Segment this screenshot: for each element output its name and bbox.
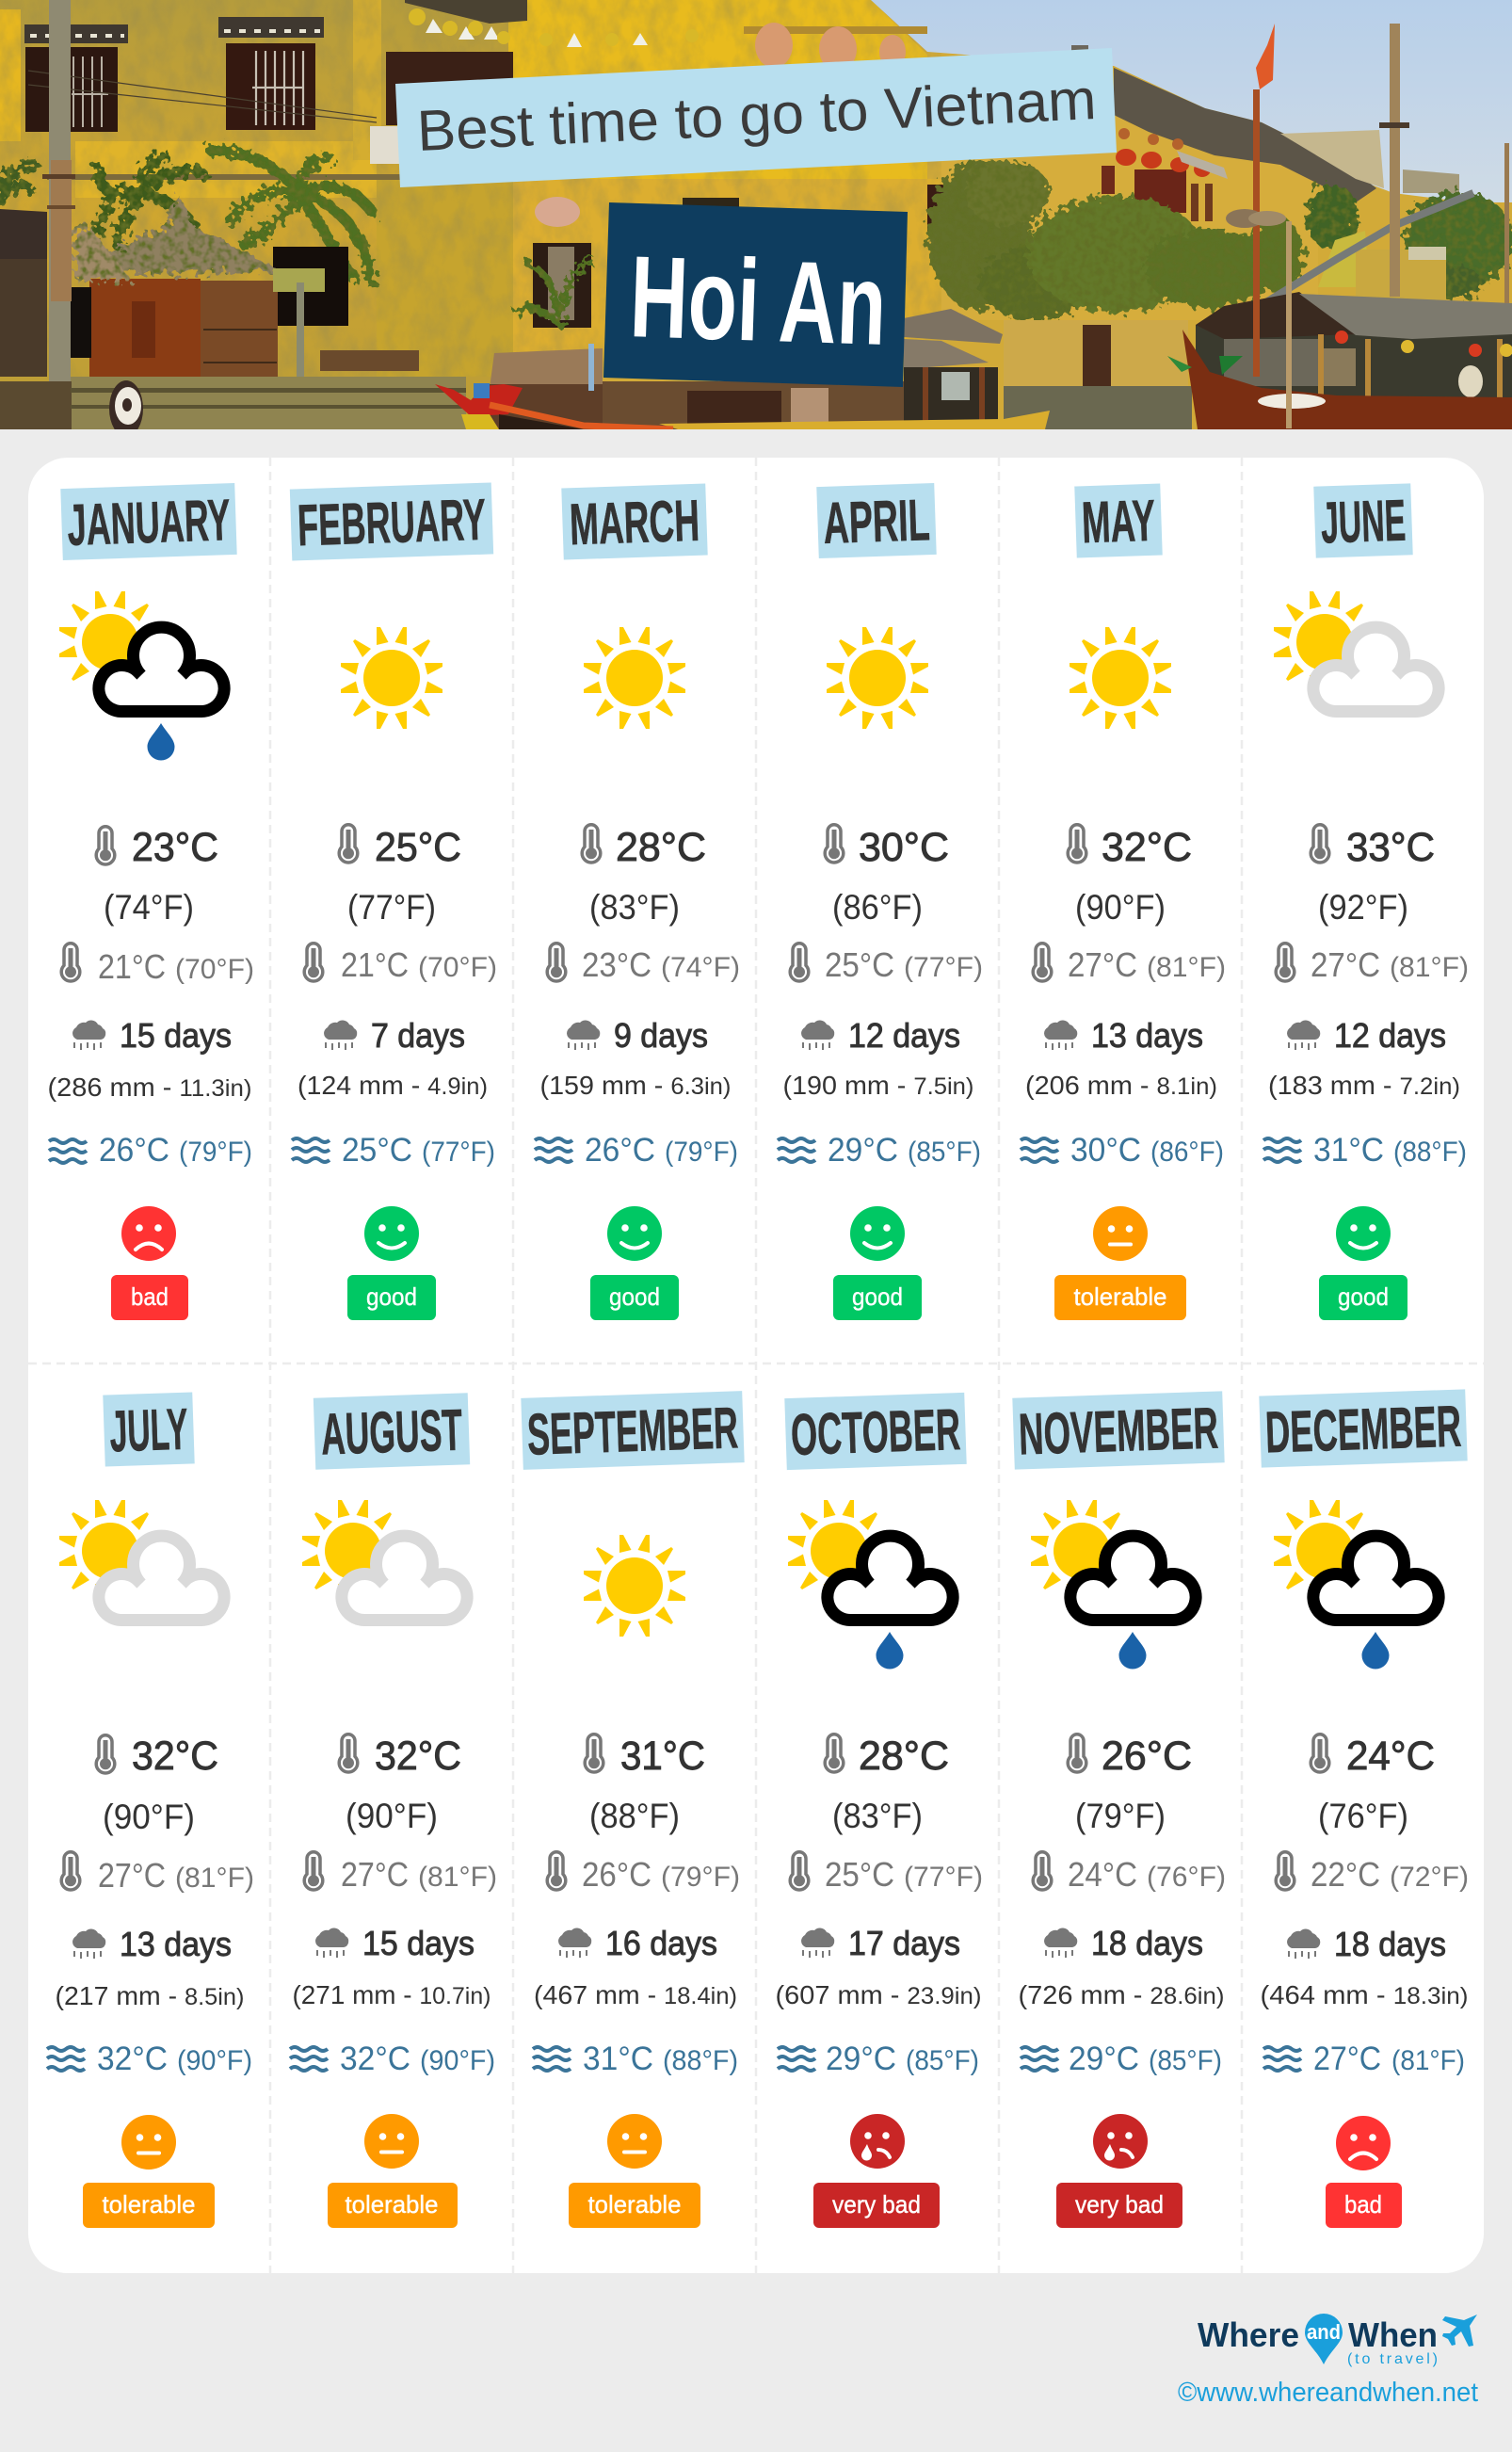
sea icon xyxy=(778,2047,815,2071)
sky xyxy=(871,0,1512,202)
rating badge xyxy=(590,1275,679,1320)
column: March xyxy=(535,483,740,1320)
sea temperature F: (90°F) xyxy=(177,2045,252,2076)
rating badge xyxy=(1054,1275,1186,1320)
rainfall: (183 mm - 7.2in) xyxy=(1268,1071,1460,1100)
month label: JANUARY xyxy=(66,488,232,558)
weather icon xyxy=(788,1500,953,1669)
sea temperature: 30°C xyxy=(1070,1132,1141,1169)
rainfall: (159 mm - 6.3in) xyxy=(539,1071,732,1100)
sea temperature F: (86°F) xyxy=(1150,1137,1224,1168)
rain icon xyxy=(567,1021,600,1050)
roofs xyxy=(1114,68,1376,202)
rainfall: (464 mm - 18.3in) xyxy=(1260,1980,1469,2009)
sea icon xyxy=(1263,1138,1301,1162)
logo word: and: and xyxy=(1307,2320,1341,2344)
month label: NOVEMBER xyxy=(1018,1396,1219,1467)
sea temperature: 26°C xyxy=(585,1132,655,1169)
low thermometer icon xyxy=(304,1852,323,1890)
low thermometer icon xyxy=(304,944,323,981)
rainy days: 15 days xyxy=(362,1924,475,1962)
rainfall: (217 mm - 8.5in) xyxy=(55,1981,245,2010)
low temperature F: (76°F) xyxy=(1147,1862,1226,1893)
spiral post xyxy=(109,380,143,429)
rating badge: good xyxy=(852,1282,903,1311)
low temperature: 27°C xyxy=(98,1856,166,1895)
upper yellow facade details xyxy=(744,26,927,34)
thermometer icon xyxy=(339,825,358,863)
thermometer icon xyxy=(1311,1734,1329,1772)
low temperature: 21°C xyxy=(341,945,409,984)
sea temperature: 31°C xyxy=(1313,1132,1384,1169)
rainy days: 9 days xyxy=(614,1016,708,1055)
low temperature F: (81°F) xyxy=(418,1862,497,1893)
high temperature: 26°C xyxy=(1102,1734,1192,1779)
logo tagline: (to travel) xyxy=(1347,2351,1438,2367)
high temperature F: (83°F) xyxy=(589,888,680,927)
column: July xyxy=(47,1392,254,2228)
rainy days: 7 days xyxy=(371,1016,465,1055)
high temperature F: (92°F) xyxy=(1318,888,1408,927)
left building windows xyxy=(24,24,128,43)
month label: APRIL xyxy=(822,488,931,557)
weather icon xyxy=(1031,1500,1196,1669)
rating badge: bad xyxy=(131,1282,169,1311)
weather icon xyxy=(1070,627,1171,729)
month label: MAY xyxy=(1081,489,1156,556)
rating badge: tolerable xyxy=(587,2190,682,2218)
logo word: When: When xyxy=(1348,2315,1438,2354)
rating badge xyxy=(569,2183,700,2228)
rain icon xyxy=(801,1021,834,1050)
sea temperature F: (81°F) xyxy=(1391,2045,1465,2076)
rainy days: 16 days xyxy=(605,1924,717,1962)
face xyxy=(1093,1206,1148,1261)
sea temperature F: (85°F) xyxy=(908,1137,981,1168)
face xyxy=(607,1206,662,1261)
month label: AUGUST xyxy=(320,1398,463,1467)
high temperature: 28°C xyxy=(859,1734,949,1779)
rain icon xyxy=(1287,1929,1320,1959)
sea temperature: 29°C xyxy=(826,2041,896,2077)
rating badge: very bad xyxy=(1075,2190,1164,2218)
rainy days: 18 days xyxy=(1091,1924,1203,1962)
low temperature F: (77°F) xyxy=(904,1862,983,1893)
low temperature F: (79°F) xyxy=(661,1862,740,1893)
rainfall: (467 mm - 18.4in) xyxy=(534,1980,737,2009)
low thermometer icon xyxy=(547,944,566,981)
month label: OCTOBER xyxy=(790,1397,961,1468)
low temperature F: (72°F) xyxy=(1390,1862,1469,1893)
face xyxy=(1093,2114,1148,2169)
orange-yellow facade with lanterns xyxy=(1134,169,1186,213)
column: May xyxy=(1021,484,1226,1320)
high temperature: 32°C xyxy=(1102,825,1192,870)
sea icon xyxy=(290,2047,328,2071)
rating badge xyxy=(111,1275,188,1320)
column: December xyxy=(1259,1389,1469,2228)
sea temperature F: (85°F) xyxy=(1149,2045,1222,2076)
sea icon xyxy=(1021,2047,1058,2071)
month label xyxy=(103,1392,195,1467)
rainy days: 13 days xyxy=(120,1925,232,1963)
rating badge: good xyxy=(366,1282,417,1311)
rating badge xyxy=(833,1275,922,1320)
low thermometer icon xyxy=(790,944,809,981)
thermometer icon xyxy=(1068,825,1086,863)
central window xyxy=(535,197,580,227)
low thermometer icon xyxy=(1276,944,1295,981)
rating badge: good xyxy=(1338,1282,1389,1311)
high temperature F: (86°F) xyxy=(832,888,923,927)
logo pin xyxy=(1305,2314,1343,2364)
month label xyxy=(1012,1391,1225,1470)
sea temperature F: (79°F) xyxy=(179,1137,252,1168)
face xyxy=(607,2114,662,2169)
month label: JULY xyxy=(108,1397,189,1464)
sea temperature F: (85°F) xyxy=(906,2045,979,2076)
low temperature: 21°C xyxy=(98,947,166,986)
logo plane icon xyxy=(1442,2315,1477,2347)
sea icon xyxy=(1263,2047,1301,2071)
right boat xyxy=(1196,325,1512,400)
month label xyxy=(1313,483,1413,558)
weather icon xyxy=(341,627,442,729)
high temperature F: (83°F) xyxy=(832,1797,923,1835)
low temperature: 23°C xyxy=(582,945,651,984)
thermometer icon xyxy=(96,827,115,864)
sea temperature: 31°C xyxy=(583,2041,653,2077)
weather icon xyxy=(59,1500,224,1620)
rating badge xyxy=(1319,1275,1407,1320)
sea temperature: 32°C xyxy=(97,2041,168,2077)
rainy days: 12 days xyxy=(1334,1016,1446,1055)
high temperature F: (79°F) xyxy=(1075,1797,1166,1835)
rating badge: tolerable xyxy=(102,2190,196,2218)
high temperature: 25°C xyxy=(375,825,461,870)
sea icon xyxy=(49,1139,87,1163)
rating badge xyxy=(328,2183,458,2228)
low thermometer icon xyxy=(790,1852,809,1890)
masts and flag xyxy=(1390,24,1400,297)
low temperature: 24°C xyxy=(1068,1855,1137,1894)
face xyxy=(121,2115,176,2170)
high temperature: 32°C xyxy=(132,1734,218,1779)
sea temperature: 32°C xyxy=(340,2041,410,2077)
wall stains xyxy=(0,0,941,377)
rating badge: tolerable xyxy=(1073,1282,1167,1311)
low temperature: 27°C xyxy=(1068,945,1137,984)
thermometer icon xyxy=(339,1734,358,1772)
rainfall: (286 mm - 11.3in) xyxy=(47,1073,252,1102)
low thermometer icon xyxy=(547,1852,566,1890)
high temperature F: (90°F) xyxy=(346,1797,438,1835)
thermometer icon xyxy=(96,1735,115,1773)
weather icon xyxy=(584,627,685,729)
rating badge xyxy=(83,2183,215,2228)
panel: monthly climate table xyxy=(28,458,1484,2273)
rain icon xyxy=(1044,1928,1077,1958)
rating badge xyxy=(1056,2183,1182,2228)
sea icon xyxy=(292,1138,330,1162)
weather icon xyxy=(59,591,224,760)
weather icon xyxy=(1274,591,1439,712)
rainfall: (726 mm - 28.6in) xyxy=(1019,1980,1224,2009)
weather icon xyxy=(584,1535,685,1637)
low temperature F: (77°F) xyxy=(904,952,983,983)
column: June xyxy=(1263,483,1469,1320)
high temperature: 33°C xyxy=(1346,825,1435,870)
rain icon xyxy=(315,1928,348,1958)
face xyxy=(1336,2116,1391,2170)
month label: FEBRUARY xyxy=(297,488,487,558)
high temperature F: (74°F) xyxy=(104,888,194,927)
sea icon xyxy=(47,2047,85,2071)
title text: Best time to go to Vietnam xyxy=(415,67,1098,163)
month label xyxy=(1074,484,1163,557)
high temperature: 31°C xyxy=(620,1734,705,1779)
month label xyxy=(784,1393,967,1470)
sea temperature: 29°C xyxy=(828,1132,898,1169)
low temperature F: (81°F) xyxy=(175,1863,254,1894)
low temperature F: (81°F) xyxy=(1390,952,1469,983)
website credit: ©www.whereandwhen.net xyxy=(1178,2378,1478,2408)
month label xyxy=(290,482,493,561)
low temperature: 27°C xyxy=(341,1855,409,1894)
high temperature: 30°C xyxy=(859,825,949,870)
rating badge xyxy=(347,1275,436,1320)
low temperature F: (70°F) xyxy=(418,952,497,983)
face xyxy=(121,1206,176,1261)
column: April xyxy=(778,483,983,1320)
rain icon xyxy=(801,1928,834,1958)
face xyxy=(364,2114,419,2169)
column: August xyxy=(290,1393,497,2228)
face xyxy=(364,1206,419,1261)
sea temperature F: (88°F) xyxy=(1393,1137,1467,1168)
rainfall: (190 mm - 7.5in) xyxy=(782,1071,974,1100)
low temperature F: (81°F) xyxy=(1147,952,1226,983)
high temperature F: (77°F) xyxy=(347,888,436,927)
column: February xyxy=(290,482,497,1320)
thermometer icon xyxy=(825,825,844,863)
trees xyxy=(927,160,1512,320)
sea temperature: 27°C xyxy=(1313,2041,1381,2077)
rainy days: 17 days xyxy=(848,1924,960,1962)
rain icon xyxy=(1044,1021,1077,1050)
low thermometer icon xyxy=(1033,1852,1052,1890)
rain icon xyxy=(72,1929,105,1959)
thermometer icon xyxy=(585,1734,603,1772)
face xyxy=(850,2114,905,2169)
rainy days: 15 days xyxy=(120,1016,232,1055)
high temperature F: (90°F) xyxy=(1075,888,1166,927)
high temperature: 23°C xyxy=(132,825,218,870)
rain icon xyxy=(324,1021,357,1050)
month label: MARCH xyxy=(569,489,700,557)
city banner xyxy=(603,202,908,387)
hero photo: Hoi An riverside street xyxy=(0,0,1512,437)
rating badge xyxy=(813,2183,940,2228)
low temperature: 27°C xyxy=(1311,945,1380,984)
weather icon xyxy=(1274,1500,1439,1669)
logo word: Where: Where xyxy=(1198,2315,1299,2354)
low thermometer icon xyxy=(1033,944,1052,981)
low thermometer icon xyxy=(61,1852,80,1890)
low temperature: 22°C xyxy=(1311,1855,1380,1894)
rating badge: tolerable xyxy=(345,2190,439,2218)
rainy days: 18 days xyxy=(1334,1925,1446,1963)
month label xyxy=(521,1391,745,1470)
rating badge: very bad xyxy=(832,2190,921,2218)
high temperature: 28°C xyxy=(616,825,706,870)
low temperature F: (74°F) xyxy=(661,952,740,983)
sea temperature F: (90°F) xyxy=(420,2045,495,2076)
low temperature: 25°C xyxy=(825,1855,894,1894)
low thermometer icon xyxy=(1276,1852,1295,1890)
high temperature F: (76°F) xyxy=(1318,1797,1408,1835)
rainfall: (607 mm - 23.9in) xyxy=(776,1980,981,2009)
low thermometer icon xyxy=(61,944,80,981)
rainfall: (124 mm - 4.9in) xyxy=(298,1071,488,1100)
face xyxy=(1336,1206,1391,1261)
sea temperature: 26°C xyxy=(99,1132,169,1169)
pole xyxy=(49,0,71,381)
weather icon xyxy=(302,1500,467,1620)
small red boat xyxy=(435,384,523,416)
month label xyxy=(314,1393,470,1470)
rainy days: 12 days xyxy=(848,1016,960,1055)
thermometer icon xyxy=(582,825,601,863)
palms and thatch xyxy=(0,151,591,325)
title banner xyxy=(395,48,1117,187)
rating badge: good xyxy=(609,1282,660,1311)
sea icon xyxy=(1021,1138,1058,1162)
month label xyxy=(561,483,708,560)
rain icon xyxy=(558,1928,591,1958)
month label xyxy=(816,483,937,558)
logo: Where and When xyxy=(1198,2314,1477,2367)
central lower stalls xyxy=(490,348,603,388)
rain icon xyxy=(1287,1021,1320,1050)
high temperature: 24°C xyxy=(1346,1734,1435,1779)
column: January xyxy=(47,483,254,1320)
column: September xyxy=(521,1391,745,2228)
thermometer icon xyxy=(1068,1734,1086,1772)
low temperature F: (70°F) xyxy=(175,954,254,985)
sea temperature: 29°C xyxy=(1069,2041,1139,2077)
sea temperature F: (77°F) xyxy=(422,1137,495,1168)
face xyxy=(850,1206,905,1261)
rainy days: 13 days xyxy=(1091,1016,1203,1055)
high temperature: 32°C xyxy=(375,1734,461,1779)
high temperature F: (90°F) xyxy=(103,1798,195,1836)
wooden hut xyxy=(89,279,201,384)
sea temperature F: (79°F) xyxy=(665,1137,738,1168)
low temperature: 25°C xyxy=(825,945,894,984)
month label: SEPTEMBER xyxy=(526,1395,739,1468)
month label xyxy=(60,483,237,560)
sea icon xyxy=(535,1138,572,1162)
rain icon xyxy=(72,1021,105,1050)
sea temperature F: (88°F) xyxy=(663,2045,738,2076)
weather icon xyxy=(827,627,928,729)
rating badge xyxy=(1326,2183,1402,2228)
rainfall: (271 mm - 10.7in) xyxy=(292,1980,491,2009)
sea temperature: 25°C xyxy=(342,1132,412,1169)
city name: Hoi An xyxy=(628,233,888,370)
month label: JUNE xyxy=(1320,489,1407,556)
thermometer icon xyxy=(1311,825,1329,863)
column: October xyxy=(776,1393,983,2228)
rainfall: (206 mm - 8.1in) xyxy=(1025,1071,1217,1100)
high temperature F: (88°F) xyxy=(589,1797,680,1835)
stone steps xyxy=(71,377,466,429)
rating badge: bad xyxy=(1344,2190,1382,2218)
thermometer icon xyxy=(825,1734,844,1772)
column: November xyxy=(1012,1391,1226,2228)
sea icon xyxy=(533,2047,571,2071)
low temperature: 26°C xyxy=(582,1855,651,1894)
sea icon xyxy=(778,1138,815,1162)
